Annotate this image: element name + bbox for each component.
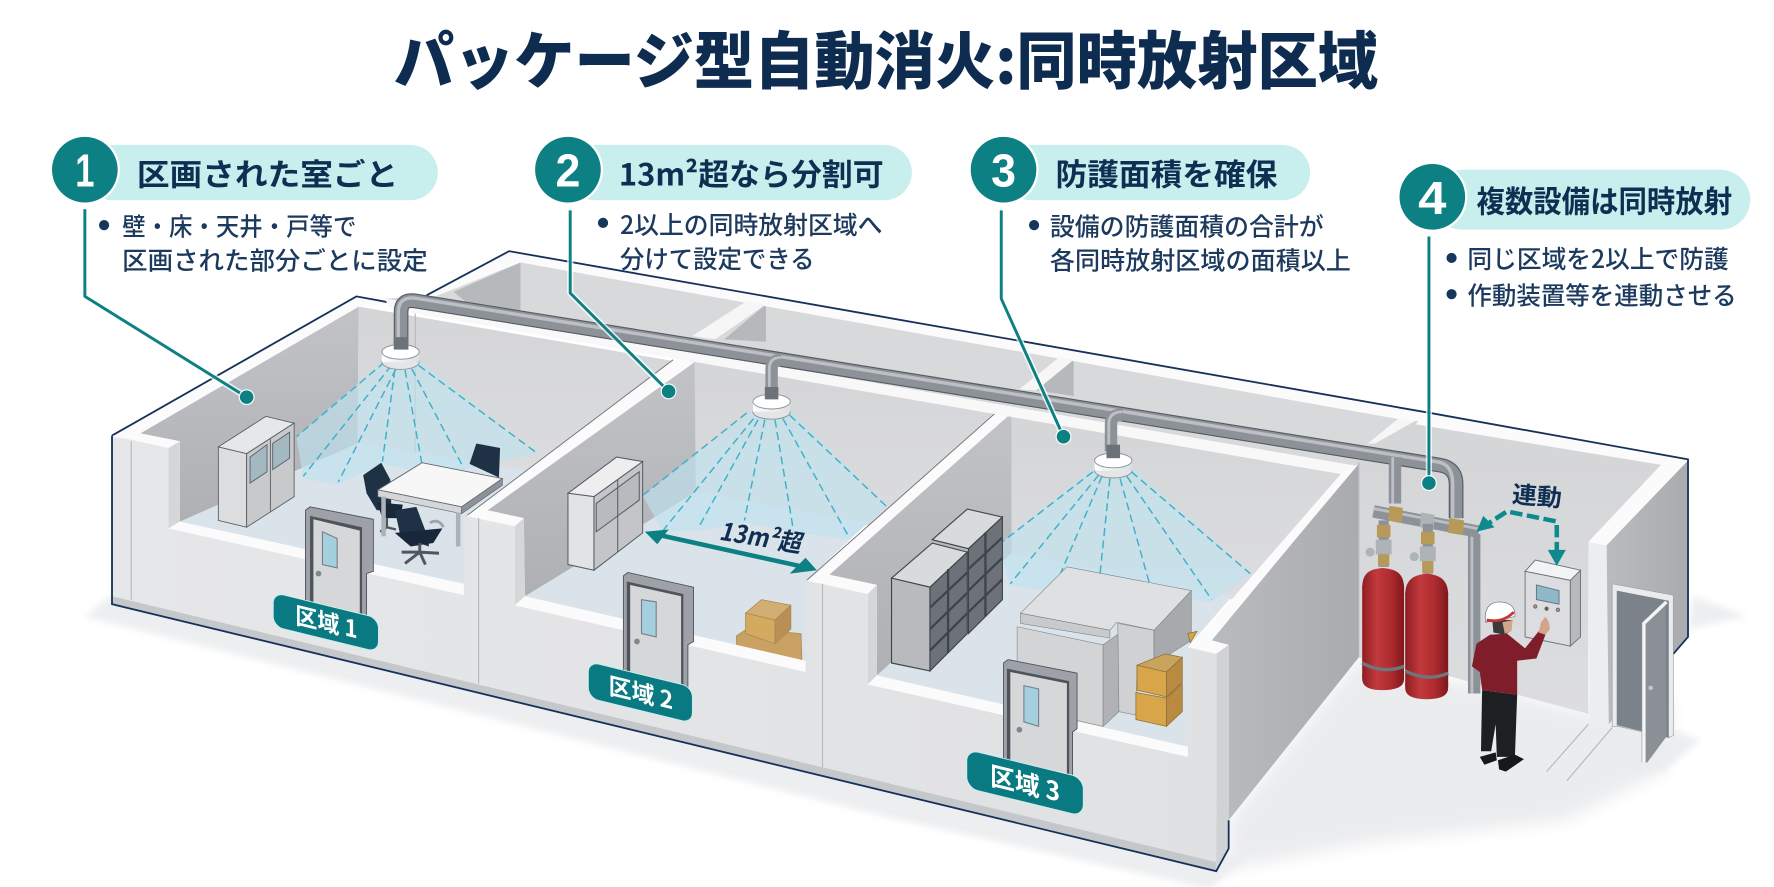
gas cylinders	[1362, 520, 1448, 699]
room 3 interior	[807, 412, 1346, 758]
label: zone 2: 区域 2	[609, 666, 673, 716]
cabinet in room 2	[568, 457, 643, 570]
callout 4: 複数設備は同時放射	[1476, 178, 1732, 222]
pipe fittings	[1388, 506, 1464, 535]
label: zone 1	[273, 590, 378, 652]
label: linkage: 連動	[1511, 474, 1564, 514]
label: zone 1: 区域 1	[295, 596, 358, 645]
boxes in room 2	[737, 600, 802, 668]
bullets: callout 2: 分けて設定できる	[620, 240, 815, 276]
cabinet in room 1	[218, 416, 294, 527]
bullets: callout 3: 設備の防護面積の合計が	[1050, 207, 1324, 243]
label: zone 3	[967, 748, 1083, 816]
shelves in room 3	[892, 509, 1002, 671]
front wall	[112, 433, 1229, 871]
label: 13m2: 13m²超	[716, 513, 809, 560]
spray cone 1	[296, 360, 536, 484]
bullets: callout 3	[1029, 207, 1351, 277]
building: back rooms	[385, 251, 1430, 466]
bullets: callout 4	[1446, 240, 1737, 312]
leader line 3	[1001, 210, 1071, 444]
door 1	[305, 507, 373, 639]
callout 4: 4	[1418, 172, 1447, 224]
ground shadow	[85, 596, 1747, 887]
label: zone 3: 区域 3	[990, 754, 1060, 810]
callout 2: 13m²超なら分割可	[619, 151, 884, 195]
room 3 right wall	[1190, 463, 1359, 820]
callout 1	[50, 135, 438, 277]
door 3	[1004, 660, 1077, 806]
callout 2	[533, 135, 912, 276]
linkage dashed arrows	[1476, 511, 1566, 566]
leader line 2	[570, 210, 676, 399]
room 2 interior	[465, 360, 1011, 672]
discharge heads	[382, 337, 1132, 478]
bullets: callout 3: 各同時放射区域の面積以上	[1050, 241, 1351, 277]
mechanical room walls	[1359, 413, 1688, 781]
callout 3: 防護面積を確保	[1056, 151, 1278, 195]
table and chairs	[363, 444, 502, 565]
spray cone 2	[643, 410, 887, 540]
bullets: callout 1	[99, 207, 428, 277]
door: mechanical room	[1612, 584, 1673, 763]
callout 3	[968, 135, 1351, 277]
mechanical room floor	[1229, 657, 1673, 869]
callout 1: 1	[75, 145, 94, 197]
spray cone 3	[998, 467, 1250, 602]
room 1 interior	[112, 296, 679, 600]
leader line 1	[85, 209, 254, 404]
double arrow: 13m2 span	[645, 529, 817, 574]
leader line 4	[1422, 236, 1436, 490]
bullets: callout 1: 区画された部分ごとに設定	[122, 241, 428, 277]
worker	[1472, 602, 1550, 772]
bullets: callout 4: 同じ区域を2以上で防護	[1467, 240, 1729, 276]
callout 4	[1397, 162, 1750, 312]
machine in room 3	[1017, 567, 1191, 726]
boxes in room 3	[1136, 631, 1197, 726]
callout 3: 3	[991, 145, 1016, 197]
bullets: callout 2: 2以上の同時放射区域へ	[620, 206, 882, 242]
callout 1: 区画された室ごと	[137, 151, 398, 195]
control panel	[1525, 560, 1581, 646]
label: zone 2	[588, 661, 692, 723]
bullets: callout 1: 壁・床・天井・戸等で	[122, 207, 356, 243]
callout 2: 2	[556, 145, 580, 197]
wall between rooms and back rooms	[385, 299, 1358, 476]
bullets: callout 2	[598, 206, 882, 276]
door 2	[623, 572, 694, 713]
bullets: callout 4: 作動装置等を連動させる	[1467, 276, 1737, 312]
title: パッケージ型自動消火:同時放射区域	[394, 12, 1378, 102]
main pipe	[398, 298, 1479, 694]
